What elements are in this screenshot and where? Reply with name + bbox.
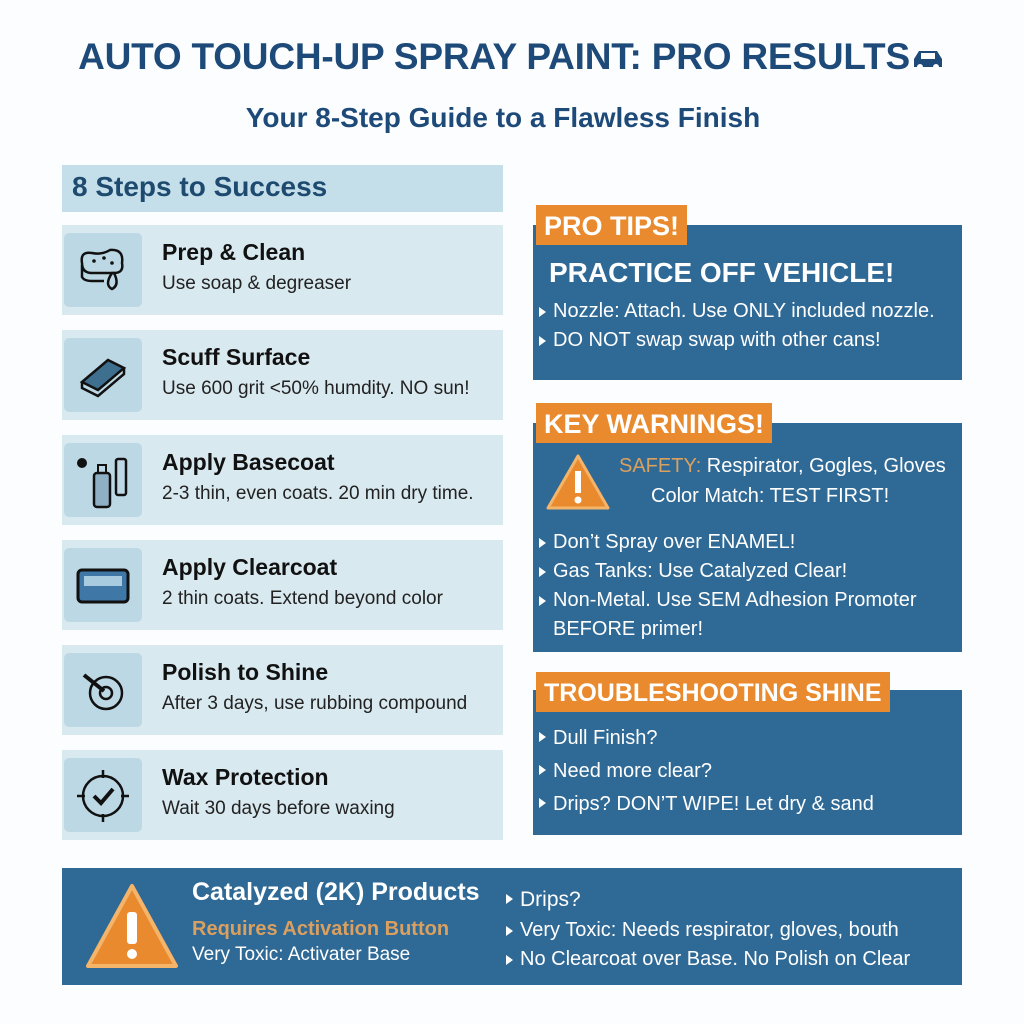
panel: catalyzed products: Very Toxic: Activater Base: [192, 944, 410, 965]
panel: troubleshooting: Need more clear?: [553, 760, 712, 782]
subtitle: Your 8-Step Guide to a Flawless Finish: [246, 102, 760, 133]
panel: catalyzed products: Requires Activation Button: [192, 918, 449, 940]
panel: key warnings: SAFETY: Respirator, Gogles, Gloves: [619, 455, 946, 477]
step: scuff: [62, 330, 503, 420]
panel: key warnings: Don’t Spray over ENAMEL!: [553, 531, 795, 553]
steps header: 8 Steps to Success: [72, 171, 327, 202]
icon: warning: [546, 454, 610, 510]
step: polish: After 3 days, use rubbing compound: [162, 693, 467, 714]
step: prep: Prep & Clean: [162, 239, 305, 265]
step: wax: Wait 30 days before waxing: [162, 798, 395, 819]
panel: catalyzed products: Very Toxic: Needs respirator, gloves, bouth: [520, 919, 899, 941]
icon: big warning: [86, 884, 178, 968]
panel: catalyzed products: [62, 868, 962, 985]
step: basecoat: Apply Basecoat: [162, 449, 335, 475]
tag: pro tips: [536, 205, 687, 245]
step: wax: [62, 750, 503, 840]
panel: catalyzed products: Drips?: [520, 888, 581, 911]
panel: key warnings: Non-Metal. Use SEM Adhesion Promoter: [553, 589, 916, 611]
step: polish: [62, 645, 503, 735]
panel: pro tips: Nozzle: Attach. Use ONLY included nozzle.: [553, 300, 935, 322]
panel: troubleshooting: Dull Finish?: [553, 727, 657, 749]
step: scuff: Scuff Surface: [162, 344, 310, 370]
panel: troubleshooting: Drips? DON’T WIPE! Let dry & sand: [553, 793, 874, 815]
step: prep: [62, 225, 503, 315]
panel: catalyzed products: No Clearcoat over Base. No Polish on Clear: [520, 948, 910, 970]
panel: pro tips: DO NOT swap swap with other cans!: [553, 329, 881, 351]
tag: pro tips: PRO TIPS!: [544, 211, 679, 241]
step: prep: Use soap & degreaser: [162, 273, 351, 294]
panel: key warnings: Gas Tanks: Use Catalyzed Clear!: [553, 560, 847, 582]
tag: troubleshooting: TROUBLESHOOTING SHINE: [544, 679, 882, 707]
title: AUTO TOUCH-UP SPRAY PAINT: PRO RESULTS: [78, 36, 910, 77]
step: basecoat: 2-3 thin, even coats. 20 min dry time.: [162, 483, 474, 504]
panel: pro tips: [533, 225, 962, 380]
panel: catalyzed products: Catalyzed (2K) Products: [192, 878, 480, 906]
step: clearcoat: 2 thin coats. Extend beyond color: [162, 588, 443, 609]
tag: key warnings: [536, 403, 772, 443]
step: clearcoat: Apply Clearcoat: [162, 554, 337, 580]
step: basecoat: [62, 435, 503, 525]
steps header: [62, 165, 503, 212]
step: scuff: Use 600 grit <50% humdity. NO sun!: [162, 378, 470, 399]
tag: key warnings: KEY WARNINGS!: [544, 409, 764, 439]
panel: key warnings: [533, 423, 962, 652]
panel: troubleshooting: [533, 690, 962, 835]
step: wax: Wax Protection: [162, 764, 329, 790]
panel: key warnings: Color Match: TEST FIRST!: [651, 485, 889, 507]
tag: troubleshooting: [536, 672, 890, 712]
step: clearcoat: [62, 540, 503, 630]
panel: pro tips: PRACTICE OFF VEHICLE!: [549, 257, 894, 288]
panel: key warnings: BEFORE primer!: [553, 618, 703, 640]
step: polish: Polish to Shine: [162, 659, 328, 685]
